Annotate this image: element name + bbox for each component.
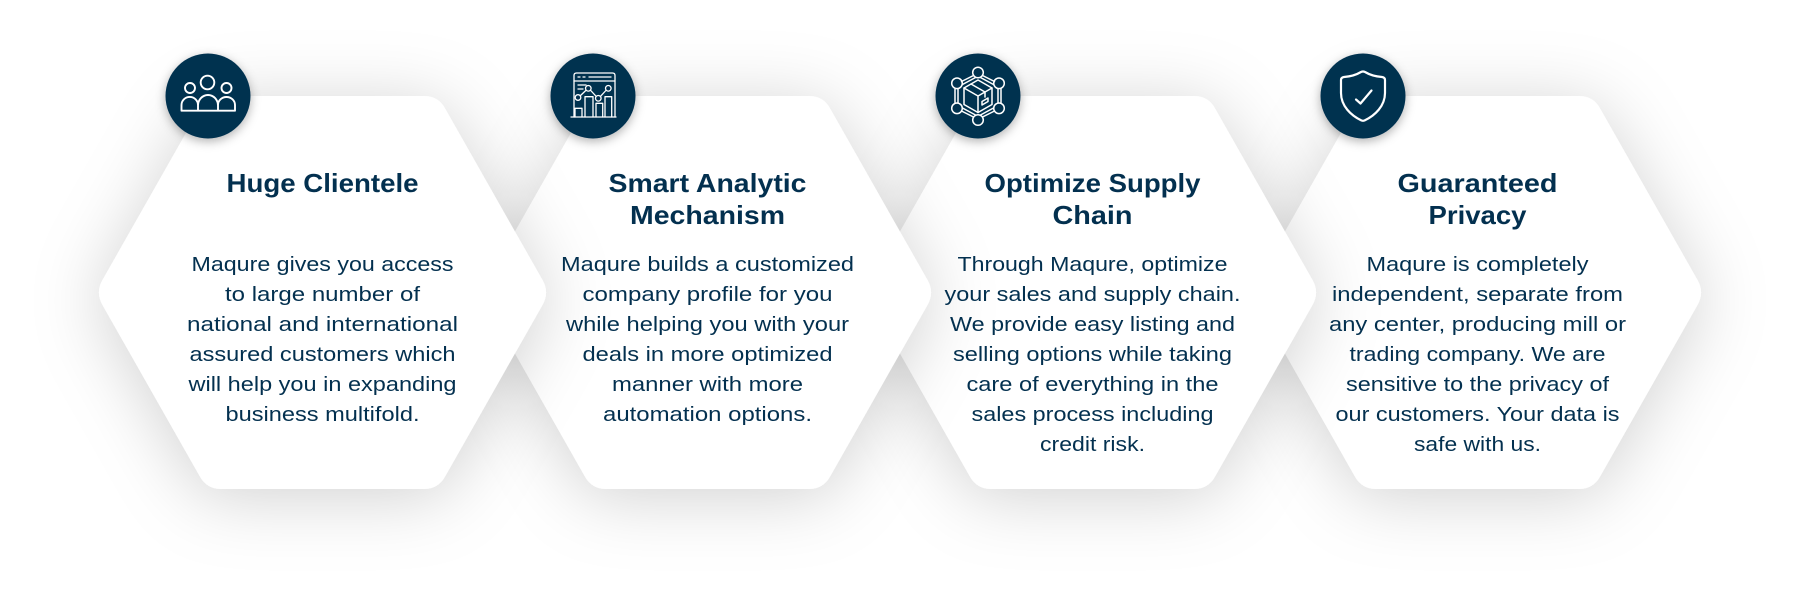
panel: Smart Analytic Mechanism xyxy=(550,54,854,426)
heading: Guaranteed Privacy xyxy=(1398,168,1558,230)
text block: Guaranteed Privacy description: independent, separate from xyxy=(1332,283,1623,306)
text block: Guaranteed Privacy description: any center, producing mill or xyxy=(1329,313,1626,336)
heading: Guaranteed Privacy: Guaranteed xyxy=(1398,168,1558,198)
heading: Optimize Supply Chain xyxy=(984,168,1201,230)
text block: Huge Clientele description xyxy=(187,253,458,426)
text block: Optimize Supply Chain description: your sales and supply chain. xyxy=(944,283,1240,306)
text block: Optimize Supply Chain description: We provide easy listing and xyxy=(950,313,1235,336)
text block: Huge Clientele description: Maqure gives you access xyxy=(192,253,454,276)
icon: shield check xyxy=(1320,54,1406,138)
icon: people group xyxy=(166,54,250,138)
text block: Huge Clientele description: business multifold. xyxy=(226,403,420,426)
panel: Guaranteed Privacy xyxy=(1320,54,1626,456)
heading: Smart Analytic Mechanism: Mechanism xyxy=(630,200,785,230)
text block: Guaranteed Privacy description: sensitive to the privacy of xyxy=(1346,373,1609,396)
panel: Huge Clientele xyxy=(166,54,458,426)
text block: Optimize Supply Chain description: care of everything in the xyxy=(966,373,1218,396)
text block: Smart Analytic description: Maqure builds a customized xyxy=(561,253,854,276)
text block: Optimize Supply Chain description: selling options while taking xyxy=(953,343,1232,366)
text block: Huge Clientele description: will help you in expanding xyxy=(187,373,456,396)
heading: Huge Clientele: Huge Clientele xyxy=(226,168,418,198)
text block: Huge Clientele description: to large number of xyxy=(225,283,420,306)
text block: Huge Clientele description: assured customers which xyxy=(190,343,456,366)
panel: Optimize Supply Chain xyxy=(936,54,1240,456)
icon: box network xyxy=(936,54,1020,138)
text block: Optimize Supply Chain description: sales process including xyxy=(972,403,1214,426)
text block: Optimize Supply Chain description: credit risk. xyxy=(1040,433,1145,456)
text block: Guaranteed Privacy description: Maqure is completely xyxy=(1366,253,1589,276)
text block: Optimize Supply Chain description: Through Maqure, optimize xyxy=(958,253,1228,276)
text block: Smart Analytic description: deals in more optimized xyxy=(582,343,832,366)
text block: Guaranteed Privacy description: safe with us. xyxy=(1414,433,1541,456)
heading: Optimize Supply Chain: Chain xyxy=(1052,200,1132,230)
heading: Optimize Supply Chain: Optimize Supply xyxy=(984,168,1201,198)
text block: Huge Clientele description: national and international xyxy=(187,313,458,336)
heading: Guaranteed Privacy: Privacy xyxy=(1428,200,1527,230)
text block: Smart Analytic description: company profile for you xyxy=(582,283,832,306)
hexagon panels, each casting a shadow on the next xyxy=(99,96,1701,489)
heading: Smart Analytic Mechanism xyxy=(608,168,806,230)
text block: Optimize Supply Chain description xyxy=(944,253,1240,456)
text block: Guaranteed Privacy description xyxy=(1329,253,1626,456)
text block: Guaranteed Privacy description: our customers. Your data is xyxy=(1336,403,1620,426)
text block: Smart Analytic description xyxy=(561,253,854,426)
heading: Smart Analytic Mechanism: Smart Analytic xyxy=(608,168,806,198)
text block: Smart Analytic description: while helping you with your xyxy=(565,313,849,336)
text block: Smart Analytic description: manner with more xyxy=(612,373,803,396)
text block: Smart Analytic description: automation options. xyxy=(603,403,812,426)
text block: Guaranteed Privacy description: trading company. We are xyxy=(1350,343,1606,366)
icon: analytics dashboard xyxy=(550,54,636,138)
